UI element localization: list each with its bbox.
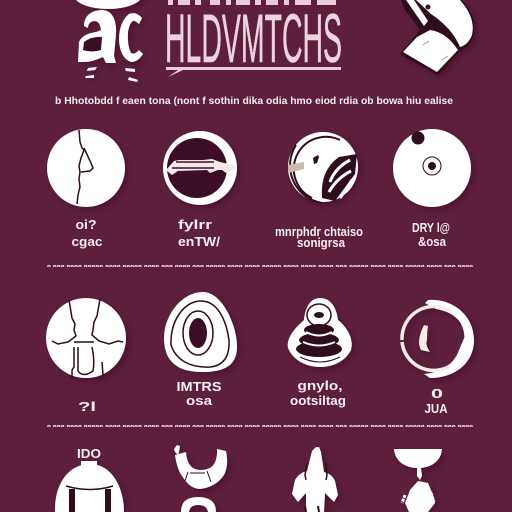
panel: row 1 item 2 (163, 131, 237, 249)
panel: row 3 item 3 (292, 447, 338, 512)
panel: row 2 item 3 (288, 298, 352, 408)
panel: row 2 item 4: JUA (424, 401, 448, 416)
icon: split circle (47, 129, 125, 207)
panel: row 1 item 3: sonigrsa (297, 235, 346, 250)
panel: row 2 item 4: 0 (431, 386, 443, 401)
icon: ring with striped oval (288, 132, 358, 203)
panel: row 1 item 3 (275, 132, 363, 250)
header icon: right bird figure (400, 0, 474, 75)
label: row 3 item 1: IDO (77, 446, 101, 461)
icon: circle with joint outline (46, 298, 126, 378)
icon: concentric egg (164, 292, 237, 372)
icon: bowl and pendant (394, 449, 442, 512)
icon: stacked rings cone (288, 298, 352, 367)
icon: rounded vessel (55, 461, 124, 512)
text: a aaa aaaa aaaaa aaaa aaaaa aaaa aaa aaaa aaa aaaaa aaaa aaaa aaaaa aaaa aaaa aaaa aaa aaaaa aaaa aaaa aaaaa aaaa aaa aaaa (47, 263, 474, 268)
panel: row 2 item 3: gnylo, (298, 378, 342, 393)
panel: row 2 item 3: ootsiltag (290, 393, 346, 408)
panel: row 1 item 2: enTW/ (178, 234, 220, 249)
panel: row 1 item 4: DRY l@ (412, 220, 450, 235)
subtitle: b Hhotobdd f eaen tona (nont f sothin dika odia hmo eiod rdia ob bowa hiu ealise (55, 95, 453, 107)
panel: row 3 item 2 (174, 445, 227, 512)
icon: winged tower (292, 447, 338, 512)
panel: row 1 item 1: cgac (72, 234, 102, 249)
panel: row 2 item 2: IMTRS (176, 379, 222, 394)
title (165, 0, 342, 77)
panel: row 2 item 4 (402, 300, 474, 416)
panel: row 2 item 1 (46, 298, 126, 414)
panel: row 1 item 2: fylrr (178, 217, 212, 232)
panel: row 1 item 1 (47, 129, 125, 249)
icon: disc with dot (393, 129, 471, 207)
panel: row 1 item 4: &osa (418, 234, 447, 249)
icon: crescent collar (174, 445, 227, 512)
panel: row 3 item 4 (394, 449, 442, 512)
panel: row 2 item 2: osa (186, 393, 213, 408)
panel: row 1 item 1: oi? (76, 217, 97, 232)
panel: row 2 item 2 (164, 292, 237, 408)
panel: row 2 item 1: ?l (78, 399, 96, 414)
icon: open ring (402, 300, 474, 378)
text: a aaa aaaa aaaaa aaaa aaaaa aaaa aaa aaaa aaa aaaaa aaaa aaaa aaaaa aaaa aaaa aaaa aaa aaaaa aaaa aaaa aaaaa aaaa aaa aaaa (47, 423, 474, 428)
icon: dark disc with tool (163, 131, 237, 205)
panel: row 1 item 4 (393, 129, 471, 249)
panel: row 3 item 1 (55, 446, 124, 512)
header icon: left character (73, 0, 143, 82)
panel: row 1 item 3: mnrphdr chtaiso (275, 224, 363, 239)
